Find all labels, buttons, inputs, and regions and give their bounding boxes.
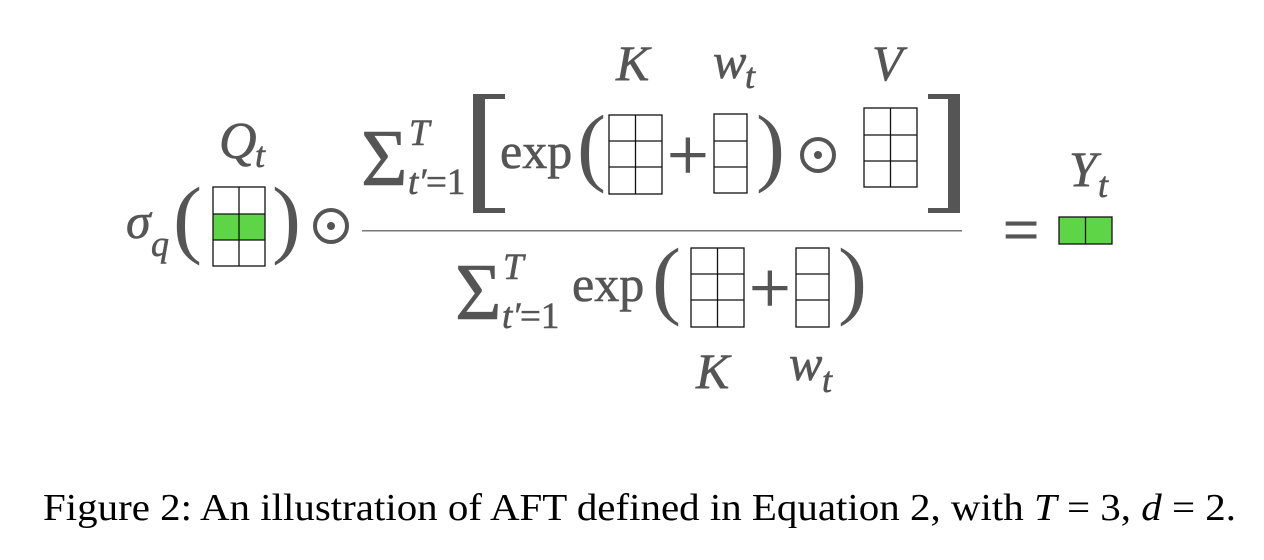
- sigma q activation symbol: [126, 193, 169, 264]
- label: Y t: t: [1098, 165, 1109, 205]
- denominator sum symbol: T: [503, 247, 526, 288]
- left parenthesis around Q: (: [173, 169, 202, 266]
- caption: Figure 2: An illustration of AFT defined in Equation 2, with T = 3, d = 2.: [43, 487, 1236, 529]
- vector w numerator: [714, 114, 747, 193]
- numerator sum symbol: t′: [408, 162, 427, 203]
- label: V: V: [872, 35, 908, 91]
- sigma q activation symbol: σ: [126, 193, 153, 249]
- right parenthesis numerator: ): [756, 97, 785, 194]
- label: Q t: t: [255, 135, 266, 175]
- label: K denominator: K: [695, 343, 732, 399]
- numerator sum symbol: Σ: [361, 115, 408, 203]
- sigma q activation symbol: q: [151, 224, 169, 264]
- numerator sum symbol: T: [409, 113, 432, 154]
- denominator sum symbol: Σ: [455, 249, 502, 337]
- left parenthesis denominator: (: [652, 230, 681, 327]
- label: Y t: Y: [1069, 141, 1102, 197]
- left square bracket: [473, 94, 505, 213]
- label: w t numerator: [713, 33, 756, 96]
- output vector Y: [1059, 217, 1112, 244]
- denominator sum symbol: t′: [502, 296, 521, 337]
- numerator sum symbol: =1: [426, 162, 465, 203]
- label: w t denominator: w: [789, 335, 822, 391]
- matrix Q with highlighted row: [213, 187, 265, 266]
- label: w t denominator: t: [822, 360, 833, 400]
- label: w t numerator: t: [745, 56, 756, 96]
- plus denominator: +: [749, 248, 791, 330]
- right parenthesis around Q: ): [272, 169, 301, 266]
- label: Q t: Q: [219, 113, 257, 170]
- numerator sum symbol: [361, 113, 465, 203]
- denominator sum symbol: [455, 247, 559, 337]
- matrix V: [864, 108, 917, 187]
- equals sign: =: [1003, 194, 1039, 265]
- vector w denominator: [796, 248, 829, 327]
- plus numerator: +: [667, 115, 709, 197]
- label: w t numerator: w: [713, 33, 746, 89]
- denominator exp: exp: [572, 256, 644, 312]
- label: K numerator: K: [615, 35, 652, 91]
- label: Y t: [1069, 141, 1109, 205]
- operator: circled dot: [315, 210, 347, 242]
- matrix K denominator: [691, 248, 744, 327]
- right parenthesis denominator: ): [838, 230, 867, 327]
- matrix K numerator: [609, 115, 662, 194]
- operator: circled dot numerator: [802, 139, 834, 171]
- left parenthesis numerator: (: [577, 97, 606, 194]
- right square bracket: [928, 94, 960, 213]
- numerator exp: exp: [500, 123, 572, 179]
- fraction line: [362, 230, 962, 232]
- denominator sum symbol: =1: [520, 296, 559, 337]
- label: w t denominator: [789, 335, 833, 400]
